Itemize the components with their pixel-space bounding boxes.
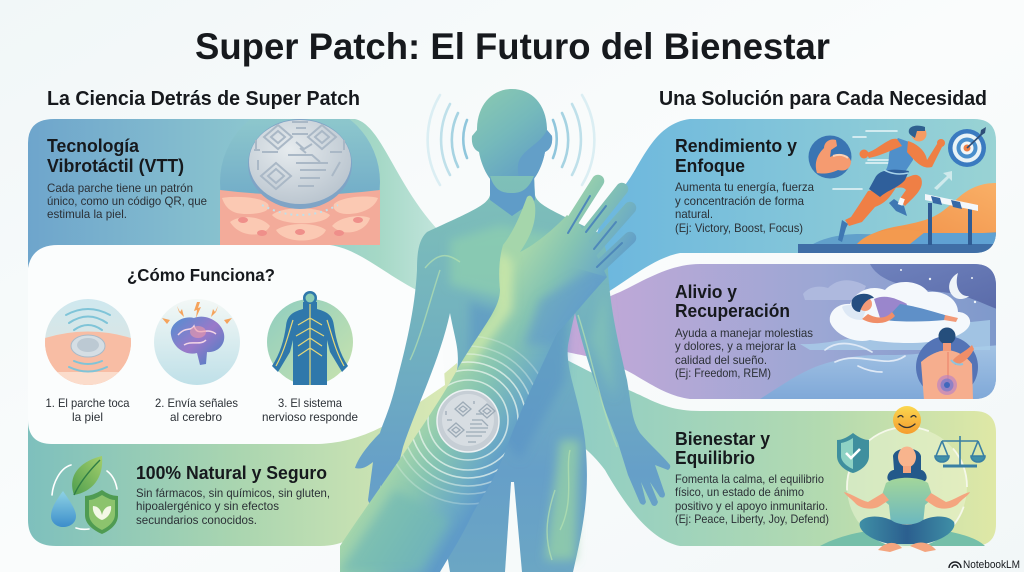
vibration waves around head bbox=[428, 95, 594, 185]
night sky bbox=[870, 264, 1000, 310]
vibration rings on the arm bbox=[396, 336, 538, 505]
heading and text: bienestar y equilibrio: Equilibrio bbox=[675, 447, 755, 468]
icon: step 2 brain bbox=[154, 299, 240, 385]
cloud bed bbox=[830, 282, 970, 343]
heading and text: alivio y recuperación: y dolores, y a mejorar la bbox=[675, 340, 797, 353]
logo: NotebookLM: NotebookLM bbox=[963, 559, 1020, 571]
illustration: runner scene bbox=[798, 126, 1000, 253]
icon: step 3 nervous system bbox=[267, 291, 353, 385]
heading and text: alivio y recuperación: calidad del sueño. bbox=[675, 354, 767, 367]
illustration: sleep and back relief scene bbox=[760, 264, 1000, 400]
text: step 1 caption: la piel bbox=[72, 411, 103, 424]
panel: rendimiento y enfoque background bbox=[590, 119, 996, 292]
icon: smile bbox=[893, 406, 921, 434]
heading and text: rendimiento y enfoque: y concentración de forma bbox=[675, 195, 805, 208]
icon: flexed arm bbox=[808, 136, 852, 178]
woman bbox=[844, 446, 970, 552]
raised arm bbox=[340, 181, 630, 572]
text: step 3 caption: 3. El sistema bbox=[278, 397, 343, 410]
icon: leaf, drop and shield bbox=[51, 456, 118, 534]
head bbox=[472, 89, 552, 192]
heading and text: rendimiento y enfoque: natural. bbox=[675, 208, 713, 221]
hurdle bbox=[925, 194, 978, 245]
panel background bbox=[28, 119, 440, 310]
text: natural y seguro description: hipoalergénico y sin efectos bbox=[136, 500, 279, 513]
text: descripción VTT: único, como un código QR, que bbox=[47, 195, 207, 208]
arrow bbox=[934, 171, 952, 190]
text: step 3 caption bbox=[262, 397, 358, 424]
icon: scales bbox=[935, 436, 985, 466]
hand and arm shading bbox=[340, 250, 610, 572]
heading and text: rendimiento y enfoque: Rendimiento y bbox=[675, 135, 798, 156]
text: step 3 caption: nervioso responde bbox=[262, 411, 358, 424]
panel: alivio y recuperación background bbox=[567, 264, 996, 399]
illustration: silver QR patch bbox=[248, 119, 352, 209]
text: step 2 caption: 2. Envía señales bbox=[155, 397, 238, 410]
runner bbox=[838, 126, 945, 242]
heading and text: bienestar y equilibrio bbox=[675, 428, 829, 526]
heading: left column: La Ciencia Detrás de Super Patch bbox=[47, 87, 360, 110]
hill bbox=[820, 532, 985, 546]
heading and text: bienestar y equilibrio: positivo y el apoyo inmunitario. bbox=[675, 500, 828, 513]
torso, arms and legs bbox=[355, 176, 670, 572]
heading and text: rendimiento y enfoque: (Ej: Victory, Boost, Focus) bbox=[675, 222, 803, 235]
speed lines bbox=[833, 131, 897, 189]
heading and text: alivio y recuperación: Alivio y bbox=[675, 281, 738, 302]
text: descripción VTT: estimula la piel. bbox=[47, 208, 127, 221]
central human figure bbox=[340, 89, 670, 572]
finger gaps bbox=[568, 196, 622, 267]
illustration: patch on skin bbox=[220, 119, 380, 245]
back with pain point bbox=[916, 328, 978, 400]
text: descripción VTT bbox=[47, 182, 207, 221]
text: natural y seguro description: Sin fármacos, sin químicos, sin gluten, bbox=[136, 487, 330, 500]
sleeping woman bbox=[842, 294, 958, 323]
heading: natural y seguro: 100% Natural y Seguro bbox=[136, 463, 327, 483]
heading and text: alivio y recuperación bbox=[675, 281, 813, 380]
gap between legs bbox=[505, 482, 522, 572]
heading: tecnología vibrotáctil bbox=[47, 135, 184, 176]
text: natural y seguro description: secundarios conocidos. bbox=[136, 514, 257, 527]
heading: cómo funciona: ¿Cómo Funciona? bbox=[127, 265, 275, 285]
text: natural y seguro description bbox=[136, 487, 330, 527]
heading and text: rendimiento y enfoque: Aumenta tu energía, fuerza bbox=[675, 181, 815, 194]
panel: 100% natural background bbox=[28, 363, 460, 546]
panel: tecnología vibrotáctil bbox=[28, 102, 445, 444]
heading and text: alivio y recuperación: Ayuda a manejar molestias bbox=[675, 327, 813, 340]
fingers bbox=[570, 181, 630, 266]
ring bbox=[847, 427, 967, 547]
heading and text: rendimiento y enfoque: Enfoque bbox=[675, 155, 745, 176]
text: step 2 caption: al cerebro bbox=[170, 411, 222, 424]
heading and text: bienestar y equilibrio: Bienestar y bbox=[675, 428, 771, 449]
moon bbox=[949, 273, 969, 299]
text: step 1 caption bbox=[46, 397, 130, 424]
silver patch on the arm bbox=[437, 390, 499, 452]
heading and text: bienestar y equilibrio: (Ej: Peace, Liberty, Joy, Defend) bbox=[675, 513, 829, 526]
text: step 2 caption bbox=[155, 397, 238, 424]
icon: target bbox=[948, 127, 986, 167]
heading and text: bienestar y equilibrio: físico, un estado de ánimo bbox=[675, 486, 804, 499]
background clouds bbox=[803, 280, 866, 300]
heading and text: bienestar y equilibrio: Fomenta la calma, el equilibrio bbox=[675, 473, 824, 486]
heading and text: alivio y recuperación: (Ej: Freedom, REM) bbox=[675, 367, 771, 380]
text: step 1 caption: 1. El parche toca bbox=[46, 397, 130, 410]
hills bbox=[872, 183, 996, 250]
heading: right column: Una Solución para Cada Necesidad bbox=[659, 87, 987, 110]
title: Super Patch: El Futuro del Bienestar bbox=[195, 26, 830, 67]
heading and text: alivio y recuperación: Recuperación bbox=[675, 300, 790, 321]
panel: bienestar y equilibrio background bbox=[560, 360, 996, 546]
icon: shield bbox=[837, 433, 869, 473]
icon: step 1 patch on skin bbox=[45, 299, 131, 390]
torso shading bbox=[450, 225, 615, 560]
illustration: meditation scene bbox=[820, 406, 985, 552]
heading: tecnología vibrotáctil: Tecnología bbox=[47, 135, 140, 156]
heading and text: rendimiento y enfoque bbox=[675, 135, 815, 235]
text: descripción VTT: Cada parche tiene un patrón bbox=[47, 182, 193, 195]
neck shadow bbox=[490, 176, 535, 216]
heading: tecnología vibrotáctil: Vibrotáctil (VTT) bbox=[47, 155, 184, 176]
panel: cómo funciona background bbox=[28, 245, 445, 444]
